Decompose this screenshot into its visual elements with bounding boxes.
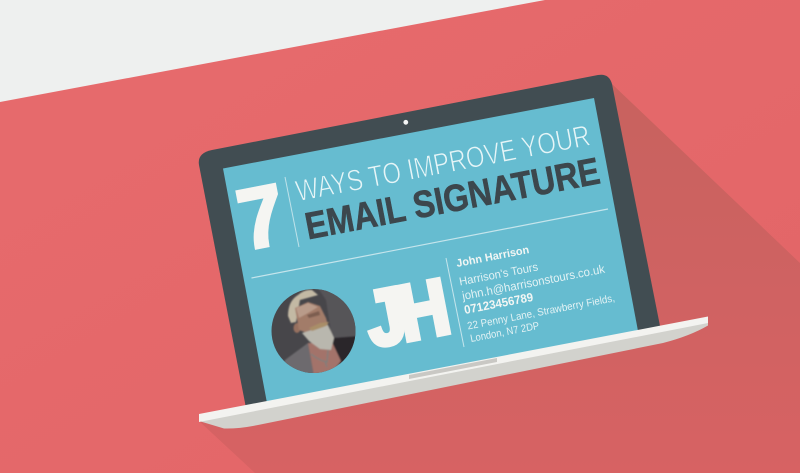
name: John Harrison bbox=[455, 244, 530, 270]
grey jacket bbox=[284, 343, 314, 373]
dark jacket bbox=[334, 336, 355, 364]
phone: 07123456789 bbox=[463, 290, 535, 317]
address line one: 22 Penny Lane, Strawberry Fields, bbox=[466, 292, 616, 332]
contact details bbox=[455, 244, 616, 345]
laptop base underside bbox=[199, 322, 708, 429]
white top band bbox=[0, 0, 545, 102]
headline block bbox=[230, 119, 603, 269]
chest bbox=[308, 342, 341, 376]
beard bbox=[302, 325, 334, 350]
portrait photo bbox=[270, 288, 358, 376]
letter H: H bbox=[391, 262, 456, 358]
eye shadow bbox=[307, 311, 320, 318]
email: john.h@harrisonstours.co.uk bbox=[460, 262, 607, 303]
camera bbox=[403, 120, 408, 125]
laptop hinge notch bbox=[409, 358, 497, 379]
number seven: 7 bbox=[230, 167, 293, 269]
mustache bbox=[309, 322, 329, 331]
headline bold line: EMAIL SIGNATURE bbox=[302, 151, 603, 248]
face bbox=[295, 302, 328, 333]
hair bbox=[288, 290, 318, 323]
forehead highlight bbox=[296, 303, 318, 318]
JH logo bbox=[359, 262, 456, 364]
company: Harrison's Tours bbox=[458, 261, 539, 288]
headline light line: WAYS TO IMPROVE YOUR bbox=[293, 119, 593, 208]
ear bbox=[294, 323, 300, 333]
section divider bbox=[252, 209, 608, 278]
blue screen bbox=[223, 98, 638, 403]
laptop bbox=[199, 75, 708, 429]
laptop long shadow bbox=[199, 84, 800, 473]
headline divider bbox=[285, 177, 299, 247]
letter J: J bbox=[359, 270, 413, 364]
contact divider bbox=[446, 258, 464, 347]
laptop screen bezel bbox=[199, 75, 660, 408]
laptop base top bbox=[199, 316, 708, 422]
backdrop highlight bbox=[318, 288, 358, 338]
necklace bbox=[311, 350, 328, 367]
address line two: London, N7 2DP bbox=[469, 320, 540, 345]
